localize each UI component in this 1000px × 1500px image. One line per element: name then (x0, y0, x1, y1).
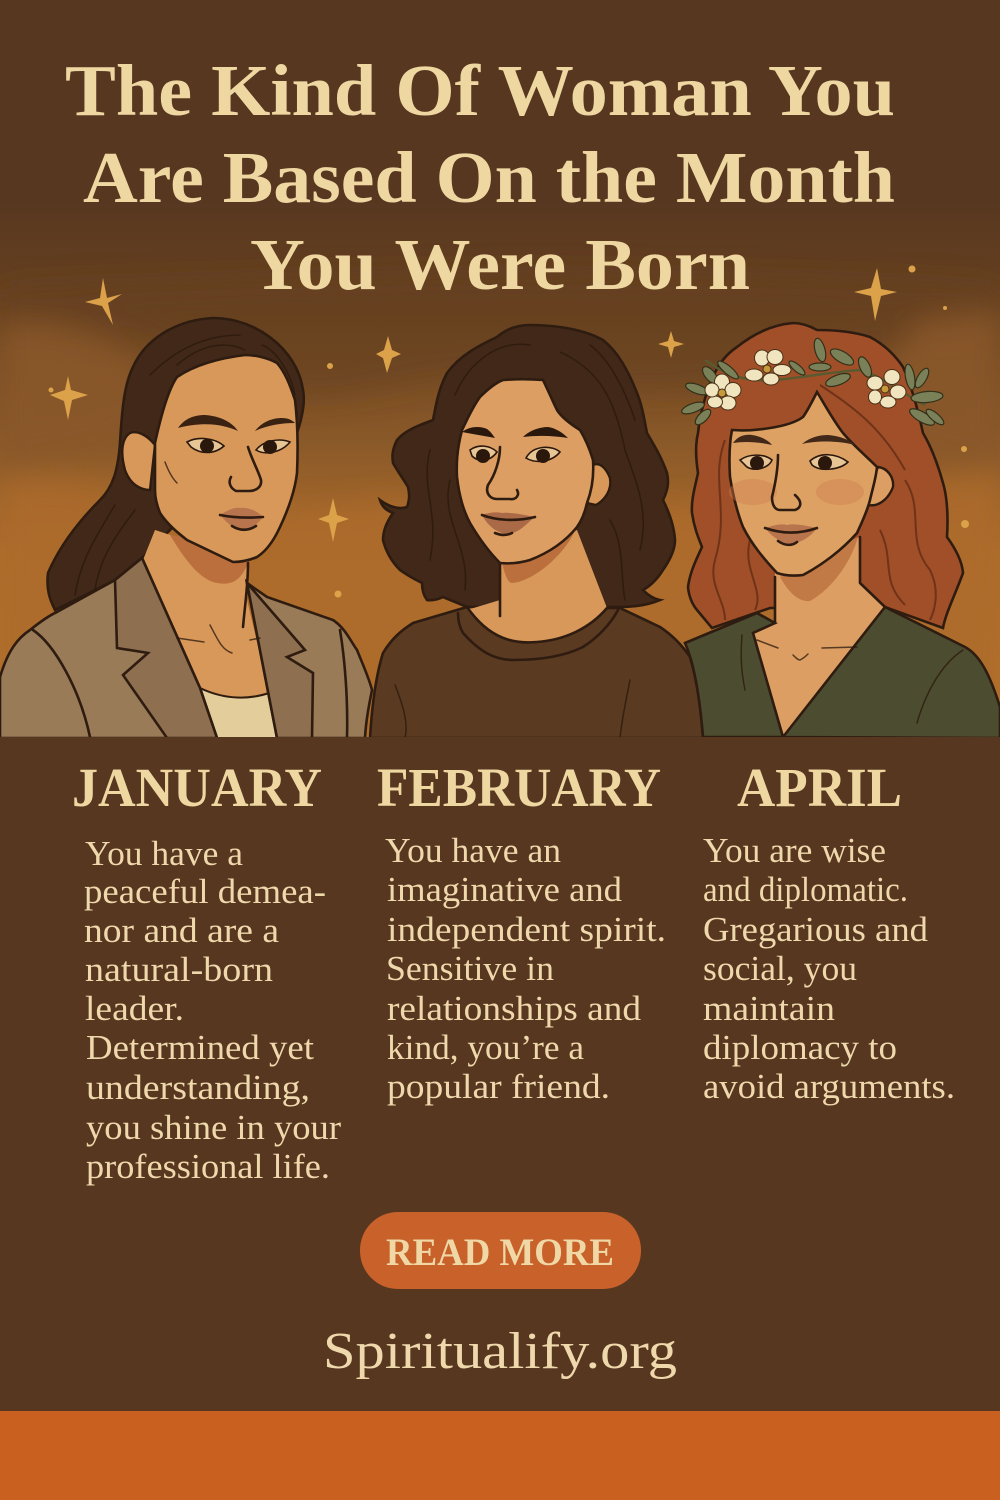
ear (122, 432, 155, 490)
hair (380, 325, 675, 607)
description: January: you shine in your (86, 1108, 341, 1147)
mouth (220, 508, 263, 530)
mouth (765, 524, 817, 545)
hair strands (713, 385, 936, 620)
description: January: You have a (85, 834, 243, 873)
description: January: understanding, (86, 1068, 310, 1107)
shirt (200, 688, 280, 738)
ear (587, 464, 610, 505)
month heading: January: JANUARY (72, 757, 322, 818)
blazer right (247, 583, 372, 738)
crown flower left (705, 374, 741, 410)
sleeve seams (33, 630, 347, 737)
neck line (499, 563, 501, 616)
description: January: peaceful demea- (84, 872, 326, 911)
neck lines (775, 537, 885, 623)
description: April: Gregarious and (703, 910, 929, 949)
description: February: You have an (385, 831, 561, 870)
face (457, 379, 593, 563)
blazer left (0, 558, 217, 738)
nose (230, 447, 261, 491)
hair strands (75, 335, 295, 595)
description: April: maintain (703, 989, 835, 1028)
description: April: avoid arguments. (703, 1067, 955, 1106)
title: You Were Born (250, 224, 750, 305)
description: April (703, 831, 955, 1106)
neck and chest (467, 530, 607, 642)
description: February: kind, you’re a (387, 1028, 584, 1067)
hair (47, 318, 304, 610)
hair (688, 323, 963, 628)
month heading: April: APRIL (737, 757, 902, 818)
crown flower right (867, 370, 906, 408)
neck shadow (170, 535, 248, 584)
sleeve line (741, 635, 963, 723)
crown stem (705, 360, 925, 405)
read more button: READ MORE (386, 1231, 614, 1274)
description: February: relationships and (387, 989, 642, 1028)
column: February (377, 757, 666, 1106)
crown leaves (680, 337, 946, 428)
eyes (187, 439, 224, 452)
description: February (385, 831, 666, 1106)
neck shadow (502, 533, 574, 583)
decorative stars (48, 266, 969, 598)
ear (866, 467, 893, 505)
green top (685, 613, 783, 737)
brows (733, 435, 772, 445)
title: The Kind Of Woman You (65, 50, 895, 131)
title: Are Based On the Month (83, 137, 895, 218)
text panel background (0, 737, 1000, 1411)
crown flower centre (745, 350, 791, 385)
eyes (470, 446, 497, 460)
description: February: independent spirit. (387, 910, 666, 949)
sweater seams (395, 680, 630, 738)
column: April (703, 757, 955, 1106)
floral crown (680, 337, 946, 428)
brows (178, 415, 238, 431)
website name: Spiritualify.org (323, 1323, 677, 1380)
cheeks (729, 479, 777, 505)
month heading: February: FEBRUARY (377, 757, 661, 818)
description: January: natural-born (85, 950, 273, 989)
neck shadow (780, 537, 858, 601)
hair strands (427, 344, 643, 600)
description: January: professional life. (86, 1147, 330, 1186)
portrait: April woman (680, 323, 1000, 738)
description: April: social, you (703, 949, 857, 988)
title (65, 50, 895, 305)
neck and chest (753, 537, 885, 737)
portrait: February woman (370, 325, 703, 738)
face (155, 355, 298, 562)
description: January: nor and are a (84, 911, 279, 950)
lapels (115, 558, 217, 738)
column: January (72, 757, 341, 1186)
neck and chest (143, 530, 280, 738)
description: April: diplomacy to (703, 1028, 897, 1067)
description: February: imaginative and (387, 870, 623, 909)
brows (462, 427, 495, 438)
collar bones (177, 625, 260, 653)
description: January: Determined yet (86, 1028, 314, 1067)
description: February: Sensitive in (386, 949, 554, 988)
cheek line (165, 462, 177, 483)
read more button (360, 1212, 641, 1289)
eyes (740, 455, 772, 469)
illustration background: dusky sky (0, 200, 1000, 738)
description: January: leader. (85, 989, 184, 1028)
description: April: and diplomatic. (703, 870, 908, 909)
portrait: January woman (0, 318, 372, 738)
sweater collar (458, 610, 618, 660)
mouth (482, 512, 535, 534)
neck line (243, 563, 248, 627)
description: February: popular friend. (387, 1067, 610, 1106)
collar bones (757, 640, 857, 660)
face (729, 392, 877, 576)
nose (487, 447, 518, 499)
description: April: You are wise (703, 831, 886, 870)
description: January (84, 834, 341, 1186)
sweater (370, 607, 703, 738)
bottom orange band (0, 1411, 1000, 1500)
nose (772, 455, 800, 510)
